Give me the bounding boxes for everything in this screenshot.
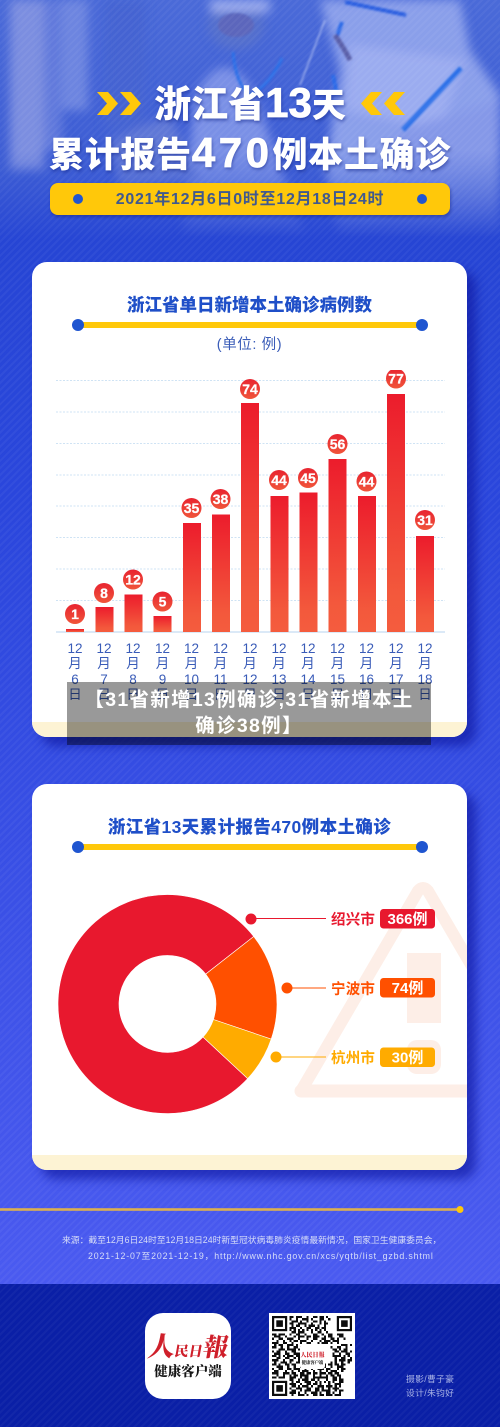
x axis dates: 日 [185, 687, 198, 702]
legend: Shaoxing [246, 909, 435, 928]
divider with end dot [0, 1206, 464, 1213]
x axis dates: 日 [97, 687, 111, 702]
x axis dates: 12 [96, 641, 112, 656]
bars with value badges: 8 [100, 585, 108, 601]
panel footer band [32, 1155, 467, 1170]
bar chart [56, 370, 445, 702]
x axis dates: 15 [330, 672, 345, 687]
source text [62, 1235, 441, 1262]
x axis dates: 月 [214, 656, 227, 671]
x axis dates: 日 [418, 687, 432, 702]
x axis dates: 月 [97, 656, 111, 671]
x axis dates: 月 [243, 656, 257, 671]
credits: 设计/朱钧好 [406, 1388, 454, 1398]
heading: cumulative cases: 浙江省13天累计报告470例本土确诊 [108, 817, 391, 837]
x axis dates: 6 [71, 672, 79, 687]
x axis dates: 12 [242, 672, 258, 687]
segment: Hangzhou [203, 1020, 271, 1079]
caption overlay: 【31省新增13例确诊,31省新增本土 [84, 689, 414, 711]
bars with value badges: 56 [330, 436, 345, 452]
x axis dates: 14 [300, 672, 316, 687]
x axis dates: 9 [159, 672, 166, 687]
x axis dates: 月 [331, 656, 344, 671]
bars with value badges: 5 [159, 594, 167, 610]
x axis dates: 月 [418, 656, 432, 671]
legend: Ningbo: 宁波市 [331, 980, 375, 998]
title line 2: 累计报告470例本土确诊 [49, 129, 451, 176]
source text: 2021-12-07至2021-12-19，http://www.nhc.gov.cn/xcs/yqtb/list_gzbd.shtml [88, 1251, 434, 1261]
x axis dates: 12 [271, 641, 287, 656]
QR centre logo: 健康客户端 [302, 1359, 324, 1366]
x axis dates: 10 [184, 672, 199, 687]
x axis dates: 月 [389, 656, 403, 671]
credits [406, 1374, 454, 1398]
bars with value badges: 44 [271, 472, 287, 488]
bars with value badges: 44 [359, 474, 374, 490]
x axis dates: 月 [156, 656, 169, 671]
panel footer band [32, 722, 467, 737]
x axis dates: 日 [389, 687, 403, 702]
header photo: medical workers in protective suits [5, 0, 500, 230]
x axis dates: 17 [388, 672, 404, 687]
x axis dates: 18 [417, 672, 433, 687]
x axis dates: 12 [388, 641, 404, 656]
QR finder squares [273, 1317, 351, 1395]
caption overlay: 确诊38例】 [195, 715, 303, 737]
x axis dates: 11 [213, 672, 228, 687]
pill left dot [73, 194, 83, 204]
x axis dates: 日 [68, 687, 82, 702]
logo wordmark: 人民日報 [146, 1332, 231, 1362]
source text: 来源：截至12月6日24时至12月18日24时新型冠状病毒肺炎疫情最新情况，国家卫生健康委员会， [62, 1235, 441, 1245]
footer band [0, 1284, 500, 1427]
x axis dates: 12 [184, 641, 199, 656]
bars with value badges: 35 [184, 500, 199, 516]
date pill [50, 183, 450, 215]
legend: Ningbo: 74例 [392, 980, 423, 997]
x axis dates: 8 [129, 672, 137, 687]
pill right dot [417, 194, 427, 204]
heading rule [72, 319, 428, 331]
x axis dates: 12 [330, 641, 345, 656]
title line 1: 浙江省13天 [154, 79, 346, 126]
bars with value badges: 38 [213, 491, 228, 507]
donut chart [58, 894, 277, 1114]
x axis dates [67, 641, 433, 702]
QR code [269, 1313, 355, 1399]
x axis dates: 13 [271, 672, 287, 687]
bars with value badges: 45 [300, 470, 316, 486]
x axis dates: 12 [155, 641, 170, 656]
x axis dates: 12 [213, 641, 228, 656]
panel: daily new cases [32, 262, 467, 737]
bars with value badges: 12 [125, 572, 141, 588]
logo: People's Daily Health app [145, 1313, 231, 1399]
heading rule [72, 841, 428, 853]
legend: Ningbo [282, 978, 435, 998]
x axis dates: 月 [301, 656, 315, 671]
legend: Hangzhou [270, 1048, 435, 1067]
icon: yellow chevrons left [97, 92, 141, 115]
x axis dates: 月 [360, 656, 373, 671]
x axis dates: 12 [300, 641, 316, 656]
x axis dates: 日 [301, 687, 315, 702]
x axis dates: 12 [359, 641, 374, 656]
bars with value badges: 31 [417, 512, 433, 528]
unit note: (单位: 例) [217, 337, 282, 353]
x axis dates: 月 [272, 656, 286, 671]
x axis dates: 日 [126, 687, 140, 702]
x axis dates: 日 [360, 687, 373, 702]
segment: Shaoxing [58, 895, 254, 1114]
x axis dates: 月 [68, 656, 82, 671]
bars with value badges: 77 [388, 370, 404, 386]
x axis dates: 日 [243, 687, 257, 702]
date range text: 2021年12月6日0时至12月18日24时 [116, 191, 384, 208]
x axis dates: 日 [331, 687, 344, 702]
x axis dates: 月 [185, 656, 198, 671]
x axis dates: 7 [100, 672, 108, 687]
caption overlay [67, 682, 431, 745]
x axis dates: 日 [156, 687, 169, 702]
x axis dates: 月 [126, 656, 140, 671]
bars with value badges [65, 368, 435, 632]
x axis dates: 日 [214, 687, 227, 702]
legend: Shaoxing: 366例 [387, 911, 428, 928]
icon: yellow chevrons right [361, 92, 405, 115]
legend: Hangzhou: 30例 [392, 1050, 423, 1066]
bars with value badges: 1 [71, 606, 79, 622]
x axis dates: 12 [417, 641, 433, 656]
bars with value badges: 74 [242, 381, 258, 397]
x axis dates: 12 [125, 641, 141, 656]
segment: Ningbo [206, 936, 277, 1039]
credits: 摄影/曹子豪 [406, 1374, 454, 1384]
x axis dates: 16 [359, 672, 374, 687]
QR centre logo: 人民日報 [300, 1351, 325, 1359]
x axis dates: 12 [242, 641, 258, 656]
legend: Shaoxing: 绍兴市 [331, 910, 375, 928]
logo subtitle: 健康客户端 [154, 1364, 222, 1379]
watermark: warning triangle [294, 882, 467, 1098]
panel: cumulative cases by city [32, 784, 467, 1170]
x axis dates: 12 [67, 641, 83, 656]
legend: Hangzhou: 杭州市 [331, 1049, 375, 1067]
heading: daily new cases: 浙江省单日新增本土确诊病例数 [127, 295, 372, 315]
QR centre logo [300, 1344, 325, 1369]
x axis dates: 日 [272, 687, 286, 702]
